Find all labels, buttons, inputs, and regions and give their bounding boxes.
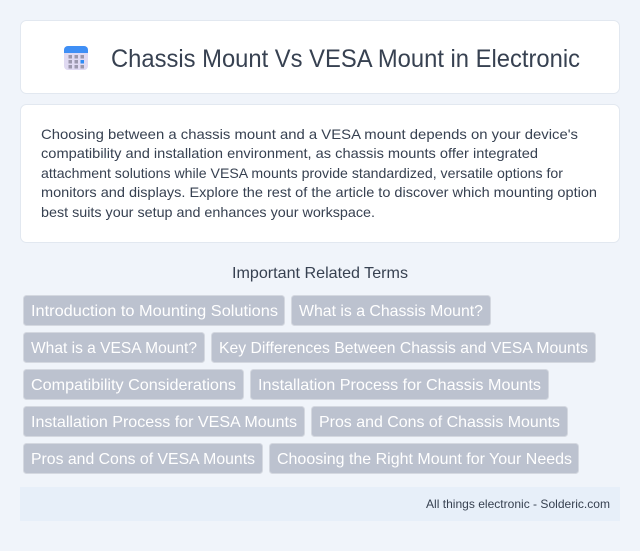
intro paragraph: Choosing between a chassis mount and a VESA mount depends on your device's (41, 126, 578, 142)
tag: Installation Process for Chassis Mounts (258, 377, 541, 394)
tag (24, 444, 262, 474)
tag (24, 296, 284, 326)
panel: intro text (20, 104, 620, 242)
footer bar (20, 487, 620, 521)
icon: calendar grid (64, 46, 88, 70)
tag: Introduction to Mounting Solutions (31, 303, 278, 320)
tag: Pros and Cons of VESA Mounts (31, 451, 255, 468)
intro paragraph: attachment solutions while VESA mounts provide standardized, versatile options for (41, 165, 563, 181)
tag (270, 444, 578, 474)
tag: Compatibility Considerations (31, 377, 236, 394)
footer credit: All things electronic - Solderic.com (426, 497, 610, 511)
tag: Key Differences Between Chassis and VESA Mounts (219, 340, 588, 357)
tag (24, 370, 244, 400)
heading: related terms: Important Related Terms (232, 265, 408, 282)
tag: What is a Chassis Mount? (299, 303, 483, 320)
tag (24, 406, 304, 436)
intro paragraph: best suits your setup and enhances your workspace. (41, 204, 375, 220)
tag (212, 332, 596, 362)
tag: Choosing the Right Mount for Your Needs (277, 451, 572, 468)
title: Chassis Mount Vs VESA Mount in Electronic (111, 45, 580, 73)
tag: Installation Process for VESA Mounts (31, 414, 297, 431)
tag (24, 332, 204, 362)
tag: Pros and Cons of Chassis Mounts (319, 414, 560, 431)
tag (312, 406, 568, 436)
tag list (24, 296, 596, 474)
panel: title card (20, 20, 620, 94)
tag (292, 296, 490, 326)
tag (250, 370, 548, 400)
intro paragraph: compatibility and installation environment, as chassis mounts offer integrated (41, 145, 538, 161)
tag: What is a VESA Mount? (31, 340, 197, 357)
intro paragraph (41, 126, 597, 220)
intro paragraph: monitors and displays. Explore the rest of the article to discover which mounting option (41, 184, 597, 200)
